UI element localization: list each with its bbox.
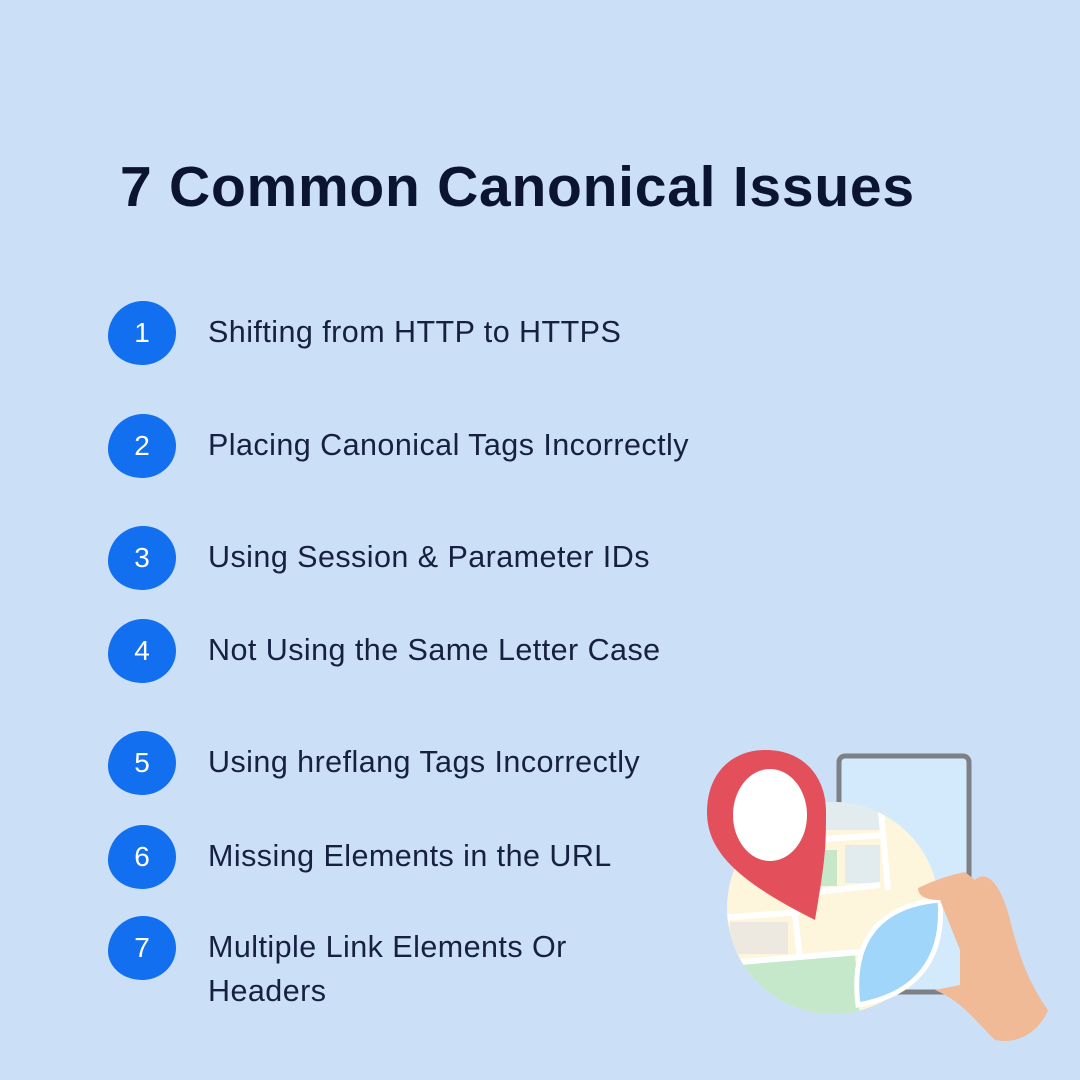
item 7: Multiple Link Elements Or bbox=[208, 930, 567, 964]
item 5: Using hreflang Tags Incorrectly bbox=[208, 745, 640, 779]
item 2: 2 bbox=[134, 430, 150, 461]
item 3: Using Session & Parameter IDs bbox=[208, 540, 650, 574]
pin bbox=[707, 750, 826, 920]
item 3 bbox=[108, 526, 650, 590]
item 5: 5 bbox=[134, 747, 150, 778]
item 6: 6 bbox=[134, 841, 150, 872]
item 4 bbox=[108, 619, 661, 683]
item 6 bbox=[108, 825, 612, 889]
title: 7 Common Canonical Issues bbox=[120, 155, 915, 219]
item 1: 1 bbox=[134, 317, 150, 348]
illustration: map phone with pin bbox=[707, 750, 1048, 1041]
item 1 bbox=[108, 301, 621, 365]
item 4: 4 bbox=[134, 635, 150, 666]
phone bbox=[839, 756, 969, 992]
item 7: Headers bbox=[208, 974, 326, 1008]
item 6: Missing Elements in the URL bbox=[208, 839, 612, 873]
item 3: 3 bbox=[134, 542, 150, 573]
item 7: 7 bbox=[134, 932, 150, 963]
item 4: Not Using the Same Letter Case bbox=[208, 633, 661, 667]
hand bbox=[918, 872, 1048, 1041]
item 7 bbox=[108, 916, 567, 1008]
item 1: Shifting from HTTP to HTTPS bbox=[208, 315, 621, 349]
water bbox=[857, 900, 941, 1005]
item 5 bbox=[108, 731, 640, 795]
item 2: Placing Canonical Tags Incorrectly bbox=[208, 428, 689, 462]
item 2 bbox=[108, 414, 689, 478]
